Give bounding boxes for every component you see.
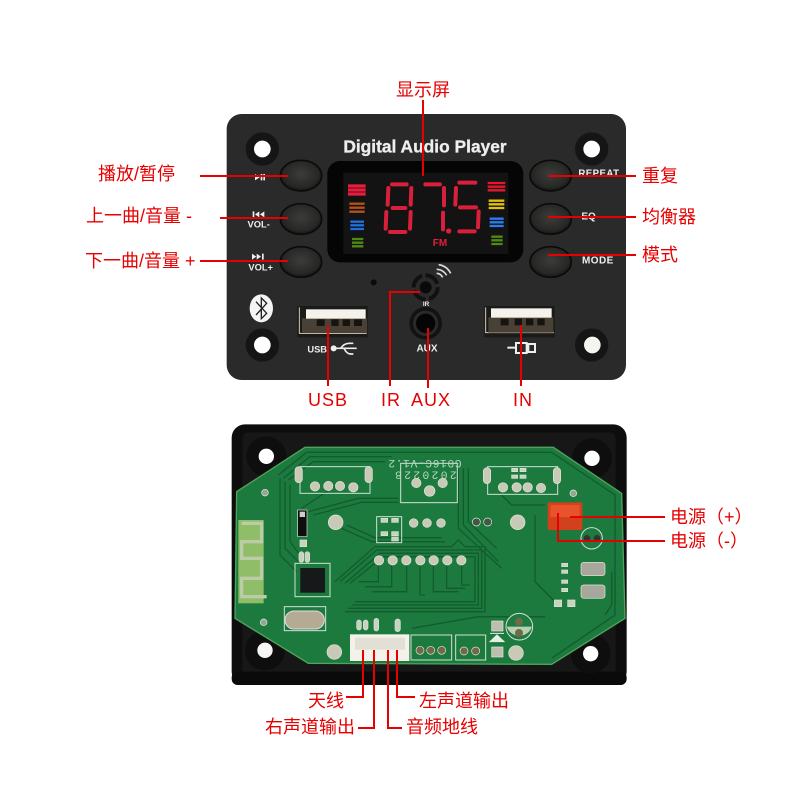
silk outlines xyxy=(295,463,558,660)
solder pads xyxy=(260,467,605,660)
main IC xyxy=(300,568,325,593)
circuit board xyxy=(235,447,625,664)
left buttons xyxy=(280,160,322,277)
AUX jack xyxy=(409,307,442,355)
label: play pause: 播放/暂停 xyxy=(98,164,175,184)
mounting holes xyxy=(246,132,608,362)
red power connector xyxy=(548,502,582,530)
label: previous track volume down: 上一曲/音量 - xyxy=(86,206,192,226)
IR receiver icon xyxy=(414,265,451,308)
left button labels xyxy=(248,174,274,273)
callout line: USB xyxy=(327,325,329,386)
capacitor C xyxy=(581,528,602,549)
label: power plus: 电源（+） xyxy=(670,507,753,527)
label: power minus: 电源（-） xyxy=(670,531,748,551)
callout line: antenna xyxy=(346,650,363,697)
callout line: display xyxy=(422,100,424,176)
left button labels: VOL+ xyxy=(248,263,274,273)
callout line: next xyxy=(200,260,288,262)
antenna area xyxy=(238,520,267,603)
callout line: AUX xyxy=(427,328,429,388)
right level bars xyxy=(488,183,505,244)
callout line: IN xyxy=(520,325,522,386)
callout line: previous xyxy=(220,217,288,219)
crystal xyxy=(284,607,326,631)
label: antenna: 天线 xyxy=(308,691,344,711)
board version text: G016C-V1.2 xyxy=(388,456,462,468)
label: IN: IN xyxy=(513,390,533,410)
callout line: mode xyxy=(548,254,636,256)
label: right channel output: 右声道输出 xyxy=(265,717,355,737)
callout line: power minus xyxy=(558,513,665,541)
USB port xyxy=(297,306,368,337)
callout line: right channel xyxy=(358,650,374,728)
frequency readout 87.5 xyxy=(386,183,479,232)
indicator dot xyxy=(371,279,377,285)
right button labels: EQ xyxy=(581,212,596,223)
AUX jack: AUX xyxy=(416,344,438,355)
label: equalizer: 均衡器 xyxy=(642,207,696,227)
product title: Digital Audio Player xyxy=(343,137,507,157)
electrolytic capacitor xyxy=(506,613,533,640)
label: USB: USB xyxy=(308,390,348,410)
callout line: audio ground xyxy=(388,650,402,728)
board date text: 2020228 xyxy=(395,468,457,480)
small components xyxy=(299,468,575,632)
left button labels: VOL- xyxy=(248,220,270,230)
regulator chip xyxy=(298,510,307,537)
right button labels: REPEAT xyxy=(578,168,619,179)
callout line: equalizer xyxy=(548,216,636,218)
USB label xyxy=(307,343,357,354)
callout line: IR xyxy=(390,292,420,386)
IN port symbol xyxy=(507,343,535,353)
copper traces xyxy=(278,452,615,658)
diode xyxy=(490,633,504,642)
IR receiver icon: IR xyxy=(423,301,430,308)
white connector xyxy=(350,634,409,661)
callout line: power plus xyxy=(570,516,665,518)
callout line: repeat xyxy=(548,175,636,177)
FM label: FM xyxy=(433,238,447,249)
right button labels: MODE xyxy=(582,255,614,266)
label: display: 显示屏 xyxy=(396,80,450,100)
right button labels xyxy=(578,168,619,266)
callout line: play pause xyxy=(200,175,288,177)
screw posts xyxy=(245,436,612,674)
bluetooth badge xyxy=(250,294,273,322)
label: next track volume up: 下一曲/音量 + xyxy=(85,251,196,271)
label: left channel output: 左声道输出 xyxy=(419,691,509,711)
callout line: left channel xyxy=(397,650,415,697)
left level bars xyxy=(348,186,366,246)
back panel xyxy=(232,424,627,685)
right buttons xyxy=(530,160,571,277)
USB label: USB xyxy=(307,344,327,354)
label: audio ground: 音频地线 xyxy=(406,717,478,737)
label: IR: IR xyxy=(381,390,401,410)
display xyxy=(327,161,523,262)
label: AUX: AUX xyxy=(411,390,451,410)
label: mode: 模式 xyxy=(642,245,678,265)
front panel xyxy=(227,114,626,380)
IN port xyxy=(484,306,555,337)
label: repeat: 重复 xyxy=(642,166,678,186)
